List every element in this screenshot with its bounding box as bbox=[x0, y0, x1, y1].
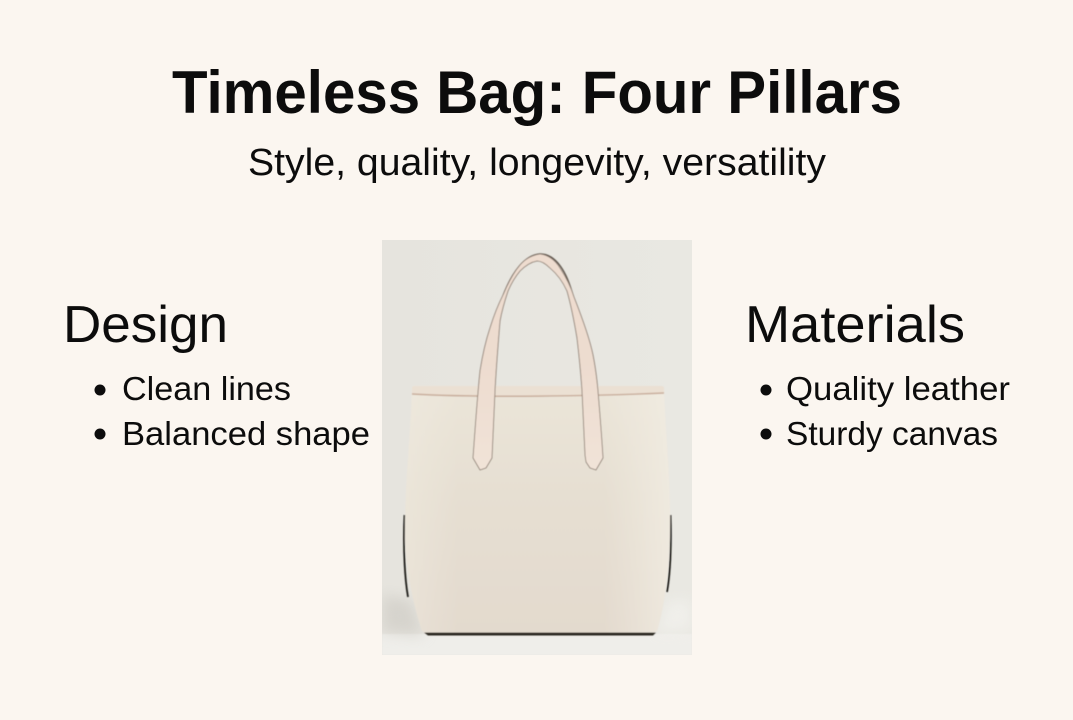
heading: materials: Materials bbox=[745, 296, 965, 354]
bullet list: design: Balanced shape bbox=[122, 415, 370, 452]
bullet list: materials: Quality leather bbox=[786, 370, 1010, 407]
bag body bbox=[405, 386, 670, 634]
floor light bbox=[382, 634, 692, 655]
title: Timeless Bag: Four Pillars bbox=[172, 59, 902, 126]
rim trim bbox=[412, 386, 664, 393]
bullet list: materials: Sturdy canvas bbox=[786, 415, 998, 452]
panel: design bbox=[63, 296, 370, 452]
bottom edge bbox=[424, 632, 656, 636]
bullet list: design: Clean lines bbox=[122, 370, 291, 407]
front strap bbox=[473, 254, 603, 470]
photo: tote bag bbox=[382, 240, 692, 655]
bullet list: design bbox=[94, 370, 370, 452]
back strap edge bbox=[503, 252, 572, 293]
subtitle: Style, quality, longevity, versatility bbox=[248, 142, 826, 184]
floor shadow bbox=[382, 597, 420, 638]
heading: design: Design bbox=[63, 296, 228, 354]
bag side edges bbox=[404, 515, 671, 597]
panel: materials bbox=[745, 296, 1010, 452]
bullet list: materials bbox=[760, 370, 1010, 452]
